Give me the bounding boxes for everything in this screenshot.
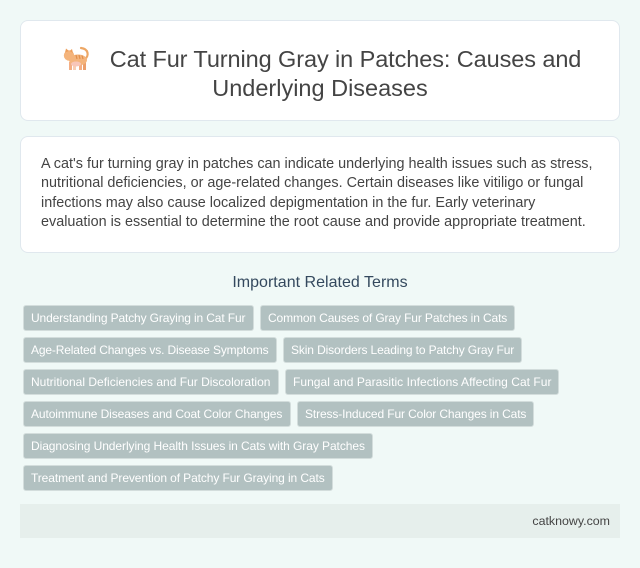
intro paragraph: A cat's fur turning gray in patches can indicate underlying health issues such as stress, [41, 156, 592, 172]
title [110, 46, 581, 101]
title: Underlying Diseases [212, 75, 428, 101]
tag [283, 337, 522, 363]
tag [23, 401, 291, 427]
tag: Age-Related Changes vs. Disease Symptoms [31, 343, 268, 357]
tag [260, 305, 515, 331]
tag: Common Causes of Gray Fur Patches in Cats [268, 311, 507, 325]
footer source: catknowy.com [532, 514, 610, 528]
tag [23, 465, 333, 491]
intro paragraph: infections may also cause localized depigmentation in the fur. Early veterinary [41, 194, 535, 210]
intro text card [20, 136, 620, 253]
tag: Diagnosing Underlying Health Issues in Cats with Gray Patches [31, 439, 365, 453]
intro paragraph: evaluation is essential to determine the root cause and provide appropriate treatment. [41, 214, 586, 230]
tag [23, 337, 277, 363]
tag: Fungal and Parasitic Infections Affecting Cat Fur [293, 375, 552, 389]
title: Cat Fur Turning Gray in Patches: Causes and [110, 46, 581, 72]
tag: Nutritional Deficiencies and Fur Discoloration [31, 375, 270, 389]
tag [297, 401, 534, 427]
icon: cat [64, 46, 89, 70]
footer bar [20, 504, 620, 538]
tag: Skin Disorders Leading to Patchy Gray Fur [291, 343, 514, 357]
tag: Understanding Patchy Graying in Cat Fur [31, 311, 245, 325]
tag: Stress-Induced Fur Color Changes in Cats [305, 407, 526, 421]
intro paragraph: nutritional deficiencies, or age-related changes. Certain diseases like vitiligo or fungal [41, 175, 583, 191]
tag: Treatment and Prevention of Patchy Fur Graying in Cats [31, 471, 325, 485]
tag: Autoimmune Diseases and Coat Color Changes [31, 407, 282, 421]
related terms tags [23, 305, 559, 491]
section heading: Important Related Terms [232, 274, 408, 291]
intro paragraph [41, 156, 592, 230]
tag [285, 369, 559, 395]
tag [23, 369, 279, 395]
tag [23, 433, 373, 459]
tag [23, 305, 254, 331]
title card [20, 20, 620, 121]
